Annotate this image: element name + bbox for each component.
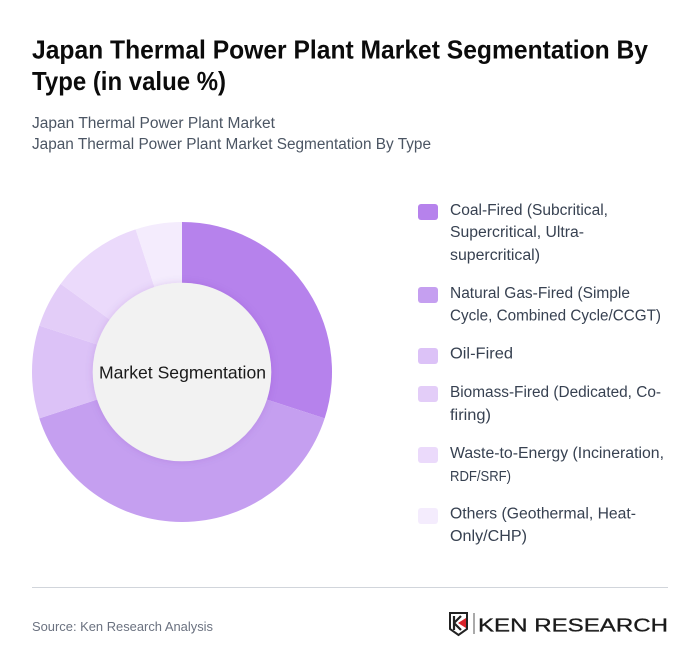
donut centre: [93, 283, 271, 461]
slice: coal-fired: [182, 222, 332, 418]
legend item: oil-fired: Oil-Fired: [450, 346, 513, 362]
legend item: others: Others (Geothermal, Heat-: [450, 506, 636, 522]
legend item: biomass-fired: firing): [450, 407, 491, 424]
source note: Source: Ken Research Analysis: [32, 619, 213, 634]
legend item: natural gas-fired: Cycle, Combined Cycle/CCGT): [450, 308, 661, 324]
legend: [418, 202, 664, 545]
slice: oil-fired: [32, 326, 182, 418]
legend item: waste-to-energy: [418, 445, 664, 485]
legend item: natural gas-fired: Natural Gas-Fired (Simple: [450, 285, 630, 302]
legend item: biomass-fired: Biomass-Fired (Dedicated, Co-: [450, 384, 661, 401]
legend item: waste-to-energy: RDF/SRF): [450, 469, 511, 485]
legend item: others: Only/CHP): [450, 528, 527, 545]
logo: Ken Research: [450, 613, 668, 636]
legend item: biomass-fired: [418, 384, 661, 424]
legend item: coal-fired: Supercritical, Ultra-: [450, 224, 584, 241]
legend item: natural gas-fired: [418, 285, 661, 324]
legend item: coal-fired: supercritical): [450, 247, 540, 264]
slice: natural gas-fired: [39, 372, 325, 522]
logo wordmark: KEN RESEARCH: [478, 614, 668, 636]
subtitle: Japan Thermal Power Plant Market Segmentation By Type: [32, 136, 431, 153]
donut chart: [32, 222, 332, 522]
legend item: waste-to-energy: Waste-to-Energy (Incineration,: [450, 445, 664, 462]
title: [32, 34, 649, 96]
legend item: coal-fired: Coal-Fired (Subcritical,: [450, 202, 608, 219]
legend item: coal-fired: [418, 202, 608, 264]
slice: others: [136, 222, 182, 372]
slice: biomass-fired: [39, 284, 182, 372]
subtitle: Japan Thermal Power Plant Market: [32, 115, 276, 132]
title: Type (in value %): [32, 66, 226, 96]
legend item: others: [418, 506, 636, 545]
slice: waste-to-energy: [61, 229, 182, 372]
legend item: oil-fired: [418, 346, 513, 364]
subtitle: [32, 115, 431, 153]
title: Japan Thermal Power Plant Market Segmentation By: [32, 34, 649, 64]
centre label: Market Segmentation: [99, 362, 266, 382]
icon: shield: [450, 613, 467, 635]
